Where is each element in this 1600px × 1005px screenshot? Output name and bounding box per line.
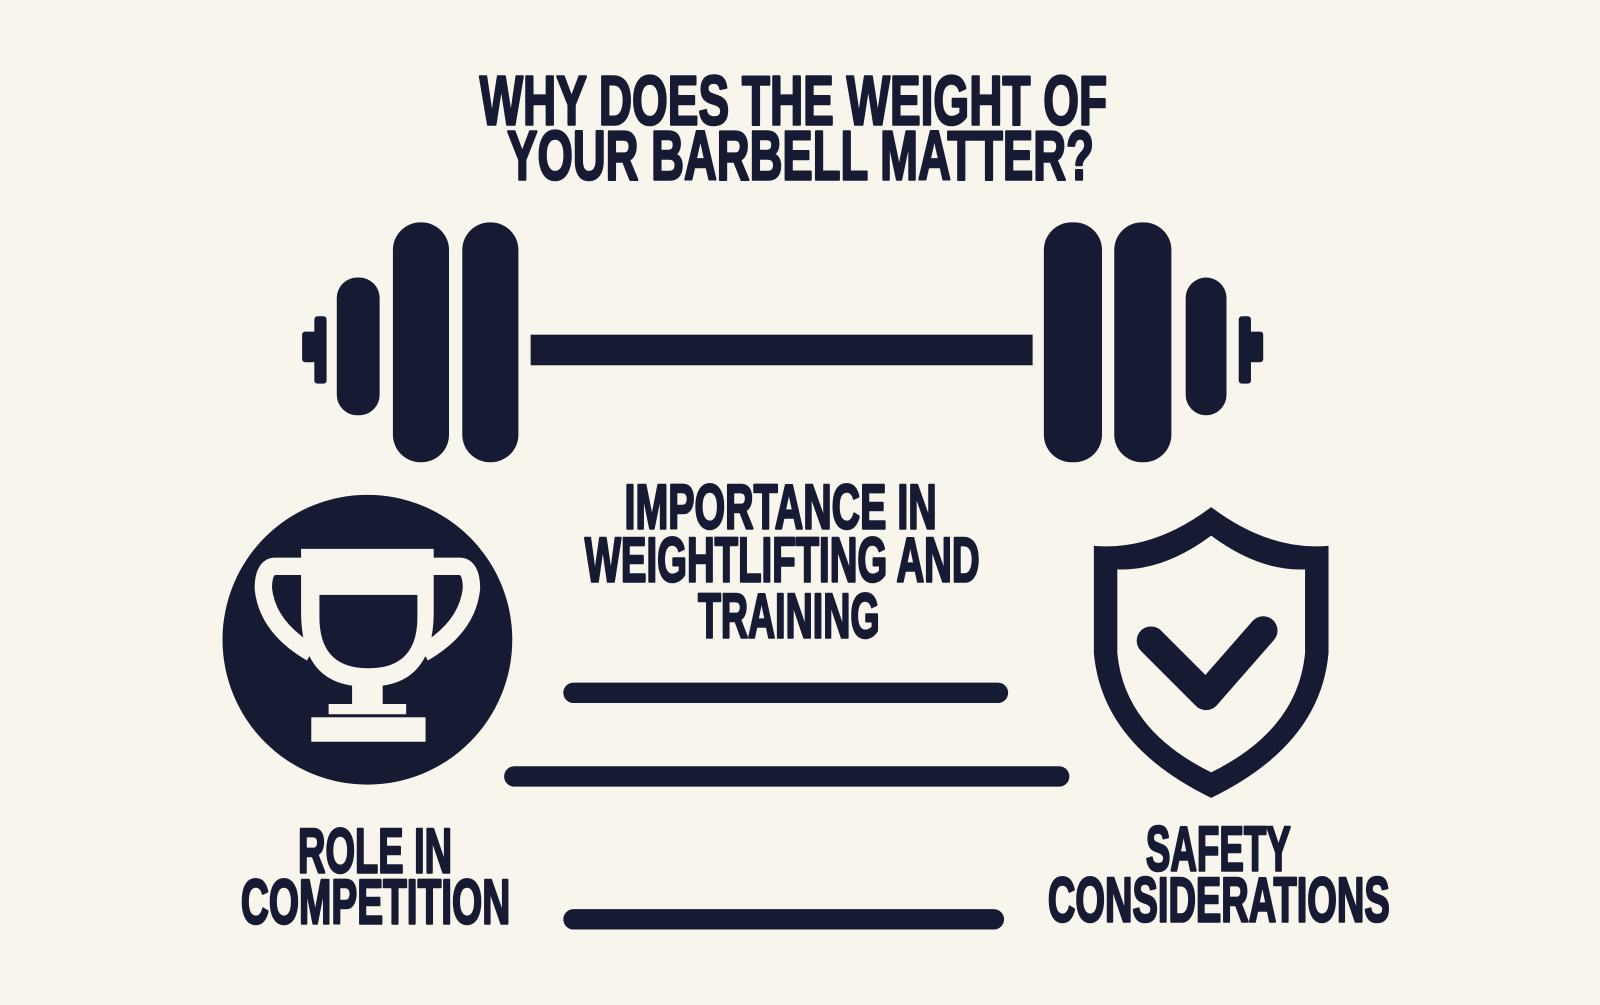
heading: importance in weightlifting and training bbox=[585, 473, 980, 652]
heading: importance in weightlifting and training: WEIGHTLIFTING AND bbox=[585, 526, 980, 596]
label: role in competition: COMPETITION bbox=[241, 867, 510, 937]
heading: importance in weightlifting and training: TRAINING bbox=[698, 582, 880, 652]
label: role in competition: ROLE IN bbox=[298, 816, 452, 886]
label: safety considerations bbox=[1048, 814, 1390, 935]
text lines placeholder bbox=[514, 693, 1059, 919]
title: WHY DOES THE WEIGHT OF bbox=[480, 61, 1107, 139]
icon: shield with check bbox=[1094, 507, 1329, 798]
title: YOUR BARBELL MATTER? bbox=[507, 117, 1094, 195]
label: safety considerations: SAFETY bbox=[1146, 814, 1291, 884]
title bbox=[480, 61, 1107, 195]
label: role in competition bbox=[241, 816, 510, 937]
label: safety considerations: CONSIDERATIONS bbox=[1048, 865, 1390, 935]
icon: barbell bbox=[302, 222, 1263, 462]
heading: importance in weightlifting and training: IMPORTANCE IN bbox=[625, 473, 937, 543]
icon: trophy bbox=[223, 495, 512, 785]
